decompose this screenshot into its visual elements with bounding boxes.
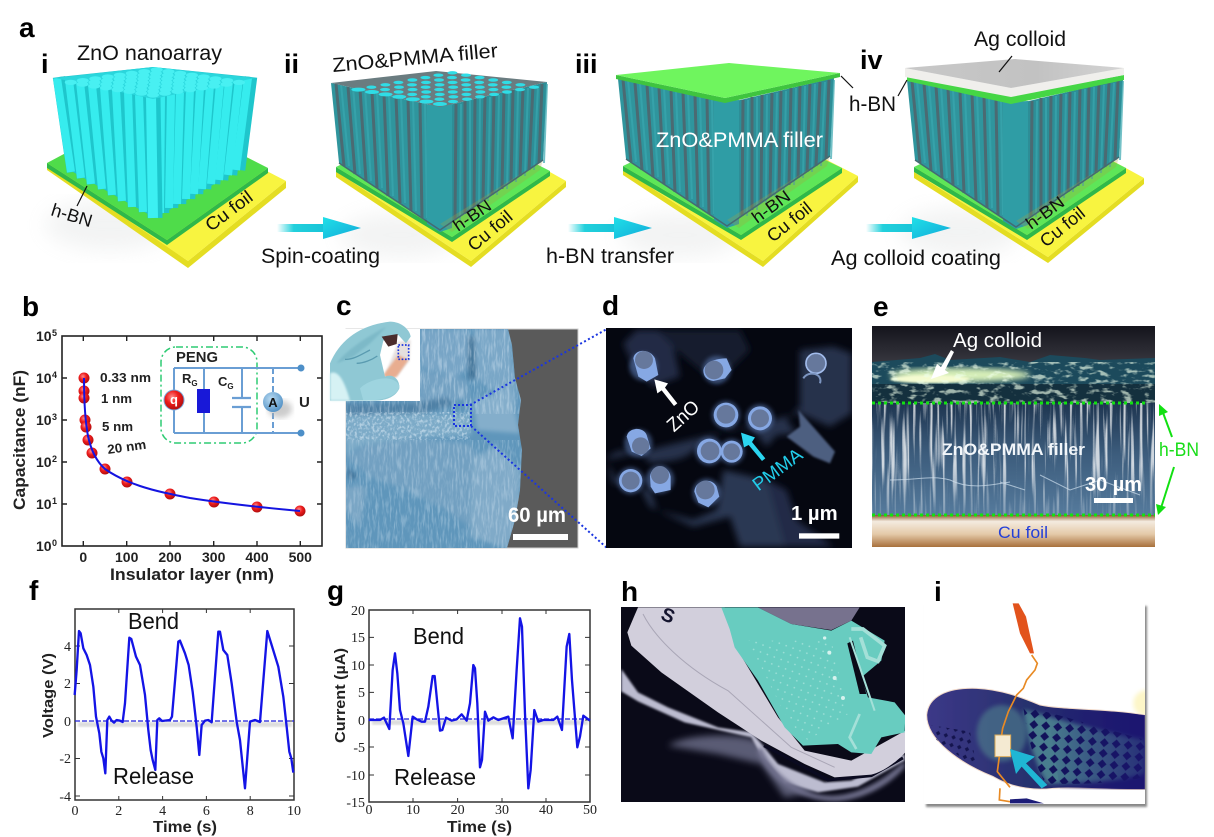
x axis tick labels: 0 [72,804,78,819]
inset: PENG equivalent circuit [161,347,310,443]
x axis tick labels [79,549,312,565]
arrow: Ag colloid coating [866,217,951,239]
floor reflection [668,735,818,797]
x axis tick labels: 100 [115,549,139,565]
panel e: cross-section SEM image [872,291,1199,547]
rod glow [617,353,774,507]
thickness annotations: 0.33 nm [100,370,151,385]
zoom box [454,405,471,426]
Ag colloid callout: Ag colloid [974,28,1066,51]
y axis tick labels: 2 [64,677,71,692]
Bend label: Bend [128,608,179,634]
gray substrate [346,329,578,548]
y axis tick labels: 10 [351,659,365,674]
current curve [369,618,590,788]
sock [758,607,860,630]
h-BN label with arrows: h-BN [1159,440,1199,461]
ZnO rods [55,67,255,218]
panel a: fabrication process [19,12,1144,270]
x axis title: Insulator layer (nm) [110,565,274,584]
x axis tick labels: 30 [495,803,509,818]
filled nanoarray block [907,79,1123,229]
y axis tick labels: -10 [346,769,365,784]
terminals [298,364,304,436]
thickness annotations: 5 nm [102,419,133,434]
y axis tick labels: 15 [351,631,365,646]
roman numeral iii: iii [575,49,598,79]
y axis tick labels: 10 [36,496,52,512]
scale label 60 µm: 60 µm [508,504,566,527]
Ag colloid plate [905,59,1124,97]
panel label d: d [602,290,619,321]
y axis tick labels: -4 [59,790,71,805]
photo shadow [926,606,1147,807]
arrow: h-BN transfer [568,217,652,239]
h-BN bottom layer [914,115,1126,240]
x axis tick labels: 6 [203,804,210,819]
y axis tick labels: 2 [52,454,57,464]
U label: U [299,394,310,411]
Ag colloid layer [872,354,1155,404]
scale bar [1094,498,1133,503]
y axis tick labels: 10 [36,454,52,470]
voltage curve [75,631,293,788]
charge source q [164,390,184,410]
y axis tick labels: 3 [52,412,57,422]
x axis tick labels: 4 [159,804,166,819]
warm corner [1132,688,1145,714]
PENG label: PENG [176,349,218,366]
right tube [787,410,835,463]
insole [927,688,1145,790]
Ag colloid callout: Ag colloid [953,330,1042,352]
x axis tick labels: 8 [247,804,254,819]
block top with rod caps [331,71,547,107]
bottom clip [1010,798,1044,803]
photo [621,604,905,802]
zero baseline [369,718,590,720]
Ag colloid callout [974,28,1066,72]
h-BN label: h-BN [1022,193,1068,233]
y axis tick labels [36,328,57,554]
fibre texture band [346,412,471,440]
Cu foil [47,112,286,268]
Cu foil layer [872,515,1155,547]
charge source q: q [170,392,178,407]
panel label c: c [336,290,352,321]
PENG boundary [161,347,257,443]
plot frame and ticks [75,609,294,800]
laces [850,629,885,749]
y axis tick labels: -5 [353,741,365,756]
h-BN callout [49,186,95,231]
ammeter A [263,392,283,412]
title ZnO nanoarray: ZnO nanoarray [77,42,223,65]
h-BN top film [907,75,1124,104]
Cu foil [914,110,1144,263]
y axis title: Current (µA) [332,648,349,743]
roman numeral ii: ii [284,49,299,79]
heel perforations [1023,707,1147,784]
eyelets [823,636,845,700]
panel c: SEM image [330,290,607,548]
sole glow [756,747,905,801]
Cu foil label: Cu foil [763,198,816,246]
x axis tick labels: 0 [79,549,87,565]
y axis title: Capacitance (nF) [10,370,29,510]
step ii: PMMA filled block [284,40,566,267]
y axis tick labels: 5 [358,686,365,701]
Cu foil label: Cu foil [201,187,257,235]
RG label: R [182,371,191,386]
arrow: spin-coating [277,217,361,239]
thickness annotations: 1 nm [101,391,132,406]
panel b: capacitance chart [10,291,322,584]
h-BN dotted lines [872,403,1155,515]
title ZnO&PMMA filler: ZnO&PMMA filler [331,40,499,77]
panel label i: i [934,576,942,607]
y axis tick labels: 10 [36,538,52,554]
thickness annotations: 20 nm [106,437,147,457]
y axis tick labels: 20 [351,604,365,619]
panel d: top-view SEM image [602,290,852,548]
h-BN top plate [616,63,840,103]
Release label: Release [394,764,476,790]
plot frame and ticks [62,336,322,546]
plot frame and ticks [369,610,590,802]
nanorod film [872,403,1155,515]
CG label: C [218,374,227,389]
filled nanoarray block [331,82,547,232]
ammeter shadow [268,400,292,418]
y axis tick labels: 0 [64,715,71,730]
scale label 30 µm: 30 µm [1085,474,1142,496]
y axis tick labels [346,604,365,811]
inset: gloved hand photo [330,322,420,401]
fit curve [84,378,300,511]
heel shading [1047,707,1145,789]
x axis title: Time (s) [153,819,217,836]
y axis tick labels [59,640,71,805]
dark background [606,328,852,548]
thickness annotations [100,370,151,457]
step i: ZnO nanoarray block [41,42,286,268]
shoe upper [627,607,905,777]
circuit wires [174,368,301,433]
alligator clip [1013,603,1034,653]
scale bar [513,534,568,540]
h-BN bottom layer [623,115,842,240]
h-BN pointer [898,80,907,96]
ZnO arrow [654,379,677,406]
y axis title: Voltage (V) [40,653,57,738]
panel label a: a [19,12,35,43]
y axis tick labels: 1 [52,496,57,506]
photo background [924,603,1145,804]
panel f: voltage chart [29,575,301,836]
Cu foil label: Cu foil [1036,203,1089,251]
baseline shadow [78,722,292,727]
panel i: insole photo [924,576,1160,807]
scale bar [799,533,839,539]
x axis tick labels [72,804,301,819]
heel mesh background [1023,710,1145,783]
outsole strip [621,669,905,792]
y axis tick labels: 10 [36,412,52,428]
nanorod tops [619,351,772,507]
panel label g: g [327,575,344,606]
RG label: G [191,379,198,388]
device [995,735,1011,757]
mesh dots [748,641,848,741]
ammeter A: A [268,395,278,410]
y axis tick labels: 4 [52,370,57,380]
panel g: current chart [327,575,597,836]
filled nanoarray block [618,78,834,228]
brand mark: S [658,604,678,629]
toe perforations [932,725,975,762]
center teal patch [977,705,1027,762]
Ag colloid callout [931,330,1042,379]
h-BN callout: h-BN [49,200,95,231]
lace gap [847,641,866,694]
x axis tick labels [366,803,597,818]
dark outsole line [764,746,903,780]
h-BN layer [336,115,550,242]
y axis tick labels: -2 [59,752,71,767]
x axis tick labels: 2 [115,804,122,819]
label Spin-coating: Spin-coating [261,245,380,268]
cyan arrow [1010,749,1047,788]
fibre texture lower [346,440,524,548]
x axis tick labels: 50 [583,803,597,818]
roman numeral i: i [41,49,49,79]
Cu foil [336,110,566,267]
y axis tick labels: 10 [36,328,52,344]
x axis tick labels: 400 [245,549,269,565]
Bend label: Bend [413,623,464,649]
y axis tick labels: 0 [358,714,365,729]
dark top background [872,326,1155,366]
Release label: Release [113,763,194,789]
x axis tick labels: 0 [366,803,372,818]
step iv: Ag coated block [860,28,1144,263]
PMMA web [607,330,852,547]
label h-BN transfer: h-BN transfer [546,245,674,268]
zero baseline [75,720,294,722]
x axis tick labels: 10 [406,803,420,818]
x axis tick labels: 20 [451,803,465,818]
panel label b: b [22,291,39,322]
resistor [197,389,210,413]
step iii: h-BN covered block [575,49,896,267]
baseline shadow [372,720,588,725]
y axis tick labels: 5 [52,328,57,338]
x axis tick labels: 500 [289,549,312,565]
y axis tick labels: 10 [36,370,52,386]
y axis tick labels: 0 [52,538,57,548]
y axis tick labels: -15 [346,796,365,811]
Cu foil label: Cu foil [464,206,516,255]
x axis title: Time (s) [447,819,512,836]
panel h: shoe photo [621,576,905,802]
scale label 1 µm: 1 µm [791,503,838,525]
dotted zoom lines to panel d [470,329,607,548]
x axis tick labels: 10 [287,804,301,819]
soft background shadows [45,200,1020,257]
roman numeral iv: iv [860,45,883,75]
upper crease [643,614,835,767]
h-BN callout [841,76,896,116]
SEM nanorod film [346,329,524,548]
data points [78,372,306,516]
h-BN label with arrows [1156,404,1199,515]
Cu foil label: Cu foil [998,523,1048,542]
CG label: G [227,382,234,391]
Cu foil [623,110,858,267]
ZnO&PMMA filler label: ZnO&PMMA filler [942,440,1085,459]
label ZnO&PMMA filler: ZnO&PMMA filler [656,129,823,152]
x axis tick labels: 40 [539,803,553,818]
h-BN label: h-BN [748,187,794,227]
h-BN label: h-BN [450,196,495,235]
label Ag colloid coating: Ag colloid coating [831,247,1001,270]
panel label e: e [873,291,889,322]
h-BN layer [47,108,268,245]
panel label h: h [621,576,638,607]
ZnO label: ZnO [663,397,704,436]
PMMA label: PMMA [748,443,807,495]
panel label f: f [29,575,39,606]
PMMA arrow [741,433,765,461]
x axis tick labels: 300 [202,549,226,565]
y axis tick labels: 4 [64,640,71,655]
h-BN callout: h-BN [849,93,896,116]
teal mesh [721,607,905,754]
gold wires [997,655,1037,802]
x axis tick labels: 200 [158,549,182,565]
fibre texture [346,329,524,414]
